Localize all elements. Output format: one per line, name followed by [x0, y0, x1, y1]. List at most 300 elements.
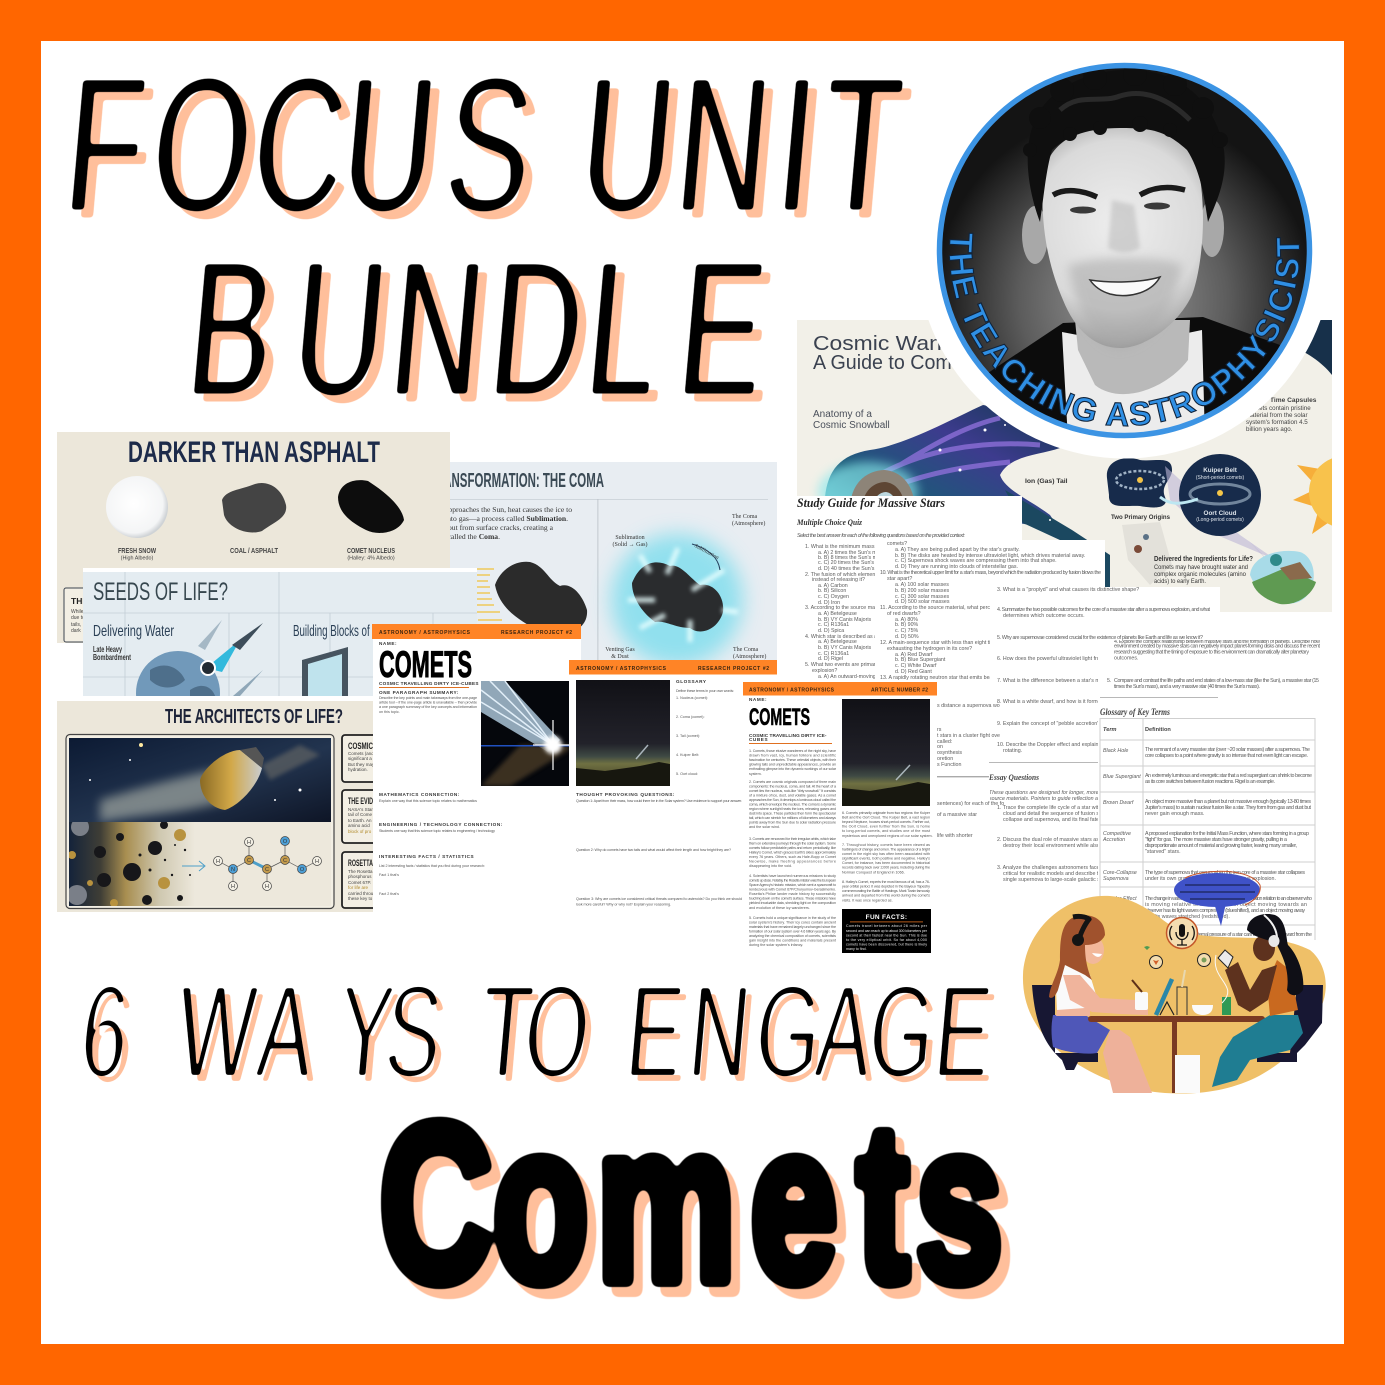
article left column: 3. Comets are renowned for their irregular orbits, which take: [749, 837, 836, 841]
orange header bar: RESEARCH PROJECT #2: [501, 630, 572, 636]
article left column: tail, which can stretch for millions of kilometers and always: [749, 816, 836, 820]
text: delivered the ingredients: [1154, 556, 1253, 585]
quiz column 1: d. D) Iron: [818, 600, 840, 606]
page: glossary of key terms: times the Sun's mass), and a very massive star (40 times the Sun's mass).: [1114, 684, 1260, 690]
section: glossary: 3. Tail (comet):: [676, 734, 700, 738]
left person: [1049, 915, 1152, 1093]
quiz column 2: d. D) They are running into clouds of interstellar gas.: [895, 564, 1018, 570]
table: glossary definitions: under its own gravity, triggering an enormous explosion.: [1145, 876, 1276, 882]
panel: cosmic wanderers infographic: [797, 320, 1385, 612]
labels: albedo comparison: COAL / ASPHALT: [230, 546, 278, 555]
section: engineering connection: Students one way that this science topic relates to engineering / technology: [379, 829, 495, 833]
illustration: solar system origins: Oort Cloud: [1204, 510, 1237, 517]
shirt: [1062, 330, 1205, 440]
quiz column 1: 3. According to the source material,: [805, 605, 888, 611]
section: thought provoking questions: Question 1: Apart from their mass, how could there be in the Solar system? Use evidence to support your answer.: [576, 799, 742, 803]
table: glossary definitions: An object more massive than a planet but not massive enough (typically 13-80 times: [1145, 799, 1311, 805]
quiz column 1: d. D) Spica: [818, 628, 844, 634]
callout box: THE: [71, 596, 88, 606]
side boxes: evidence cards: carried throu: [348, 891, 374, 896]
section: interesting facts: List 2 interesting facts / statistics that you find during your research:: [379, 864, 485, 868]
orange header bar: ASTRONOMY / ASTROPHYSICS: [576, 666, 667, 672]
fragments of definitions: on: [937, 744, 943, 750]
diagram: amino acid molecule: H: [247, 840, 251, 846]
diagram: amino acid molecule: O: [300, 867, 305, 873]
section: one paragraph summary: on this topic.: [379, 710, 400, 714]
section: glossary: [676, 679, 734, 776]
article left column: Rosetta's Philae lander made history by successfully: [749, 892, 836, 896]
article left column: Halley's Comet, which graces Earth's skies approximately: [749, 850, 836, 854]
heading: glossary: Glossary of Key Terms: [1100, 707, 1170, 717]
article left column: during the solar system's infancy.: [749, 943, 803, 947]
orange header bar: RESEARCH PROJECT #2: [698, 666, 769, 672]
table: glossary definitions: has its waves stretched (redshifted).: [1145, 914, 1230, 920]
title: focus unit bundle: [58, 38, 909, 436]
label: ion tail: Ion (Gas) Tail: [1025, 478, 1068, 485]
curved name text: THE TEACHING ASTROPHYSICIST: [948, 232, 1300, 427]
callout box: dark: [71, 628, 81, 634]
label: late heavy bombardment: [93, 646, 131, 660]
portrait badge: the teaching astrophysicist: [936, 62, 1312, 438]
table: glossary definitions: disproportionate amount of material and growing faster, leaving many smaller,: [1145, 843, 1297, 849]
decoration: upper-right navy and teal swirl: [1306, 320, 1332, 375]
orange header bar: [372, 624, 581, 639]
illustration: sun: [1293, 458, 1332, 534]
panel: the architects of life: [57, 701, 402, 912]
section: one paragraph summary: Describe the key points and main takeaways from the one-page: [379, 696, 477, 700]
section: thought provoking questions: [576, 792, 742, 906]
short answer questions: [997, 587, 1211, 754]
quiz column 1: b. B) 8 times the Sun's mass: [818, 555, 886, 561]
page: article number 2: [743, 682, 937, 957]
side boxes: evidence cards: Comet 67P.: [348, 880, 371, 885]
orange header bar: ARTICLE NUMBER #2: [871, 688, 928, 694]
photo: comet at dusk: [576, 680, 670, 786]
side boxes: evidence cards: THE EVID: [348, 796, 373, 806]
subtitle: COSMIC TRAVELLING DIRTY ICE-CUBES: [379, 681, 479, 686]
box: fun facts: FUN FACTS:: [866, 914, 907, 921]
section: interesting facts: [379, 854, 485, 896]
section: mathematics connection: [379, 792, 477, 803]
table: glossary definitions: "starved" stars.: [1145, 849, 1181, 855]
article left column: every 76 years. Others, such as Hale-Bopp or Comet: [749, 855, 836, 859]
quiz column 1: c. C) 20 times the Sun's mass: [818, 560, 889, 566]
article right column: harbingers of change and omen. The appearance of a bright: [842, 848, 930, 852]
quiz column 2: d. D) 500 solar masses: [895, 599, 950, 605]
subheading: delivering water: Delivering Water: [93, 623, 174, 640]
side boxes: evidence cards: Comets (and: [348, 751, 374, 756]
section: engineering connection: [379, 822, 503, 833]
fragments of definitions: s distance a supernova wo: [937, 703, 1000, 709]
subheading: multiple choice quiz: Multiple Choice Quiz: [796, 518, 863, 527]
article left column: 1. Comets, those elusive wanderers of the night sky, have: [749, 749, 836, 753]
article left column: region where sunlight heats the ices, releasing gases and: [749, 807, 836, 811]
quiz column 1: d. D) Rigel: [818, 656, 843, 662]
article left column: points away from the Sun due to solar radiation pressure: [749, 820, 836, 824]
article left column: solar system's history. Their icy cores contain ancient: [749, 920, 836, 924]
labels: albedo comparison: COMET NUCLEUS: [347, 546, 395, 555]
framed illustration: [66, 734, 334, 908]
quiz column 1: b. B) VY Canis Majoris: [818, 617, 872, 623]
side boxes: evidence cards: hydration.: [348, 767, 368, 772]
labels: albedo comparison: (High Albedo): [121, 556, 154, 562]
illustration: solar system origins: (Long-period comets): [1196, 517, 1244, 523]
smile: [1090, 277, 1160, 296]
article left column: comets follow predictable paths and return periodically, like: [749, 846, 836, 850]
fragments of definitions: of a massive star: [937, 812, 977, 818]
table: glossary definitions: Blue Supergiant: [1103, 774, 1141, 780]
table: glossary definitions: A proposed explanation for the Initial Mass Function, where stars forming in a group: [1145, 831, 1309, 837]
quiz column 1: a. A) Betelgeuse: [818, 611, 857, 617]
essay questions list: collapse and supernova, and its final fate.: [1003, 817, 1100, 823]
essay questions list: single supernova to large-scale galactic simulations: [1003, 877, 1124, 883]
section: glossary: 2. Coma (comet):: [676, 715, 704, 719]
right chair: [1257, 985, 1323, 1062]
callout box: While: [71, 609, 84, 615]
short answer questions: 9. Explain the concept of "pebble accretion" as a mechanism: [997, 721, 1140, 727]
fragments of definitions: s Function: [937, 762, 961, 768]
labels: coma callouts: Venting Gas: [605, 647, 635, 653]
essay questions list: 2. Discuss the dual role of massive stars as both destructive: [997, 837, 1138, 843]
box: fun facts: to the very elliptical orbit. So far about 4,000: [846, 938, 927, 942]
panel: seeds of life: [83, 568, 477, 696]
side boxes: evidence cards: block of pro: [348, 829, 372, 834]
section: one paragraph summary: [379, 690, 477, 714]
panel: transformation the coma: [450, 462, 777, 660]
name field: NAME:: [379, 641, 397, 646]
text: delivered the ingredients: acids) to early Earth.: [1154, 578, 1206, 585]
table: glossary definitions: Term: [1103, 727, 1116, 733]
quiz column 1: b. B) VY Canis Majoris: [818, 645, 872, 651]
illustration: comet tail: [818, 405, 1110, 592]
quiz column 2: a. A) 80%: [895, 617, 918, 623]
section: thought provoking questions: THOUGHT PROVOKING QUESTIONS:: [576, 792, 675, 797]
quiz column 1: b. B) Silicon: [818, 588, 846, 594]
illustration: solar system origins: (Short-period comets): [1196, 475, 1245, 481]
article left column: glowing tails and unpredictable appearances, provide an: [749, 762, 836, 766]
section: one paragraph summary: ONE PARAGRAPH SUMMARY:: [379, 690, 459, 695]
essay questions list: critical for realistic models and describe the "ans: [1003, 871, 1117, 877]
photo: comet over milky way: [481, 681, 569, 786]
page: glossary of key terms: research suggesting that the timing of exposure to this environment can dramatically alter planetary: [1114, 650, 1309, 656]
panel: darker than asphalt: [57, 432, 450, 643]
article right column: [842, 811, 933, 902]
side boxes: evidence cards: for life are: [348, 885, 369, 890]
heading: coma: TRANSFORMATION: THE COMA: [428, 470, 604, 492]
section: glossary: 1. Nucleus (comet):: [676, 696, 708, 700]
table: glossary definitions: Competitive: [1103, 831, 1131, 837]
heading: cosmic wanderers: A Guide to Comets: [813, 352, 978, 374]
text: time capsules: billion years ago.: [1246, 426, 1293, 433]
essay questions list: These questions are designed for longer, more detailed responses: [989, 790, 1145, 796]
quiz column 2: exhausting the hydrogen in its core?: [887, 646, 972, 652]
text block: sublimation: [450, 507, 572, 539]
short answer questions: 5. Why are supernovae considered crucial for the existence of planets like Earth and life as we know it?: [997, 635, 1203, 641]
labels: coma callouts: Sublimation: [615, 535, 645, 541]
table: glossary definitions: The type of supernova that occurs when the iron core of a massive star collapses: [1145, 870, 1305, 876]
section: glossary: 4. Kuiper Belt:: [676, 753, 699, 757]
instruction: Select the best answer for each of the following questions based on the provided context:: [797, 533, 966, 539]
text: time capsules: system's formation 4.5: [1246, 419, 1308, 426]
text: time capsules: Comets contain pristine: [1246, 405, 1311, 412]
quiz column 2: d. D) Red Giant: [895, 669, 932, 675]
article left column: and the solar wind.: [749, 825, 780, 829]
box: fun facts: [842, 909, 931, 953]
article left column: [749, 749, 837, 947]
essay questions list: destroy their local environment while also enabling: [1003, 843, 1121, 849]
diagram: amino acid molecule: H: [315, 859, 319, 865]
article left column: enthralling glimpse into the dynamic workings of our solar: [749, 767, 837, 771]
illustration: earth with comets: [136, 620, 263, 696]
quiz column 1: a. A) Carbon: [818, 583, 848, 589]
page: glossary of key terms: 5.: [1107, 678, 1111, 684]
side boxes: evidence cards: The Rosetta: [348, 869, 373, 874]
article right column: Belt and the Oort Cloud. The Kuiper Belt, a vast region: [842, 816, 930, 820]
article left column: disappearing into the void.: [749, 864, 792, 868]
page: research project worksheet 1: [372, 624, 581, 914]
short answer questions: 6. How does the powerful ultraviolet light from massive stars: [997, 656, 1138, 662]
nose shadow: [1108, 200, 1140, 252]
labels: coma callouts: & Dust: [611, 654, 629, 660]
text: delivered the ingredients: Delivered the Ingredients for Life?: [1154, 556, 1253, 563]
article right column: the Oort Cloud, even further from the Sun, is home: [842, 824, 930, 828]
illustration: yellow heat arrows: [477, 569, 502, 620]
article left column: 2. Comets are cosmic originals composed of three main: [749, 780, 836, 784]
quiz column 1: c. C) R136a1: [818, 622, 849, 628]
article right column: Comet, for instance, has been documented in historical: [842, 861, 930, 865]
box: fun facts: second at their fastest near the Sun. This is due: [846, 934, 927, 938]
fragments of definitions: t stars in a cluster fight ove: [937, 733, 1000, 739]
illustration: two people podcasting: [1023, 871, 1326, 1094]
heading: cosmic wanderers: [813, 335, 950, 369]
quiz column 2: a. A) They are being pulled apart by the star's gravity.: [895, 547, 1020, 553]
essay questions list: [989, 790, 1145, 883]
page: study guide for massive stars: [795, 495, 1105, 685]
label: late heavy bombardment: Late Heavy: [93, 645, 122, 654]
text block: sublimation: turn directly into gas—a process called Sublimation.: [406, 514, 568, 523]
page: glossary of key terms: 4. Explore the complex relationship between massive stars and the formation of planets. Describe how: [1114, 639, 1320, 645]
labels: coma callouts: The Coma: [732, 514, 757, 520]
section: glossary: GLOSSARY: [676, 679, 707, 684]
quiz column 1: instead of releasing it?: [812, 577, 865, 583]
page: glossary of key terms: environment created by massive stars can negatively impact planet-forming disks and discuss the recent: [1114, 644, 1321, 650]
orange header bar: [569, 660, 777, 674]
illustration: glowing coma: Sublimation: [693, 543, 720, 561]
illustration: solar system origins: Kuiper Belt: [1203, 467, 1238, 474]
article right column: records dating back over 2,000 years, including during the: [842, 866, 930, 870]
quiz column 2: b. B) The disks are heated by intense ultraviolet light, which drives material away.: [895, 553, 1085, 559]
article left column: 4. Scientists have launched numerous missions to study: [749, 874, 836, 878]
neck: [1075, 320, 1190, 394]
quiz column 2: c. C) 75%: [895, 628, 919, 634]
article right column: Norman Conquest of England in 1066.: [842, 870, 905, 874]
planets and debris: [1122, 522, 1172, 585]
subheading: building blocks: Building Blocks of Life: [293, 623, 388, 640]
text block: sublimation: As a comet approaches the Sun, heat causes the ice to: [409, 505, 572, 514]
illustration: spacecraft over comet: [69, 738, 331, 822]
fragments of definitions: life with shorter: [937, 833, 973, 839]
subtitle: CUBES: [749, 737, 768, 742]
short answer questions: 8. What is a white dwarf, and how is it formed?: [997, 699, 1107, 705]
title line: focus unit: FOCUS UNIT: [58, 38, 909, 252]
box: fun facts: comets have been discovered, but there is likely: [846, 942, 927, 946]
eyes: [1070, 202, 1170, 214]
quiz column 2: c. C) 300 solar masses: [895, 594, 950, 600]
table: glossary definitions: Doppler Effect: [1103, 896, 1137, 902]
mustard blob background: [1023, 896, 1326, 1094]
quiz column 1: a. A) 2 times the Sun's mass: [818, 550, 885, 556]
page: glossary of key terms: outcomes.: [1114, 656, 1138, 662]
fragments of definitions: rs: [937, 727, 942, 733]
article left column: comets up close. Notably, the Rosetta mission was the European: [749, 878, 836, 882]
table: glossary definitions: The remnant of a very massive star (over ~20 solar masses) after a supernova. The: [1145, 747, 1310, 753]
side boxes: evidence cards: ROSETTA: [348, 858, 373, 868]
table: glossary definitions: as its core switches between fusion reactions. Rigel is an example.: [1145, 779, 1275, 785]
quiz column 2: [880, 541, 1101, 681]
table: glossary definitions: "fight" for gas. The more massive stars have stronger gravity, pulling in a: [1145, 837, 1287, 843]
short answer questions: rotating.: [1003, 748, 1022, 754]
article left column: coma, which envelops the nucleus. The coma is a dynamic: [749, 802, 836, 806]
side boxes: evidence cards: amino acid: [348, 823, 370, 828]
article right column: year orbital period. It was depicted in the Bayeux Tapestry: [842, 884, 930, 888]
name field: NAME:: [749, 697, 767, 702]
label: late heavy bombardment: Bombardment: [93, 653, 131, 662]
box: fun facts: second and can reach up to about 300 kilometers per: [846, 929, 928, 933]
reaction icons: [1144, 946, 1210, 968]
article left column: Space Agency's historic mission, which sent a spacecraft to: [749, 883, 836, 887]
side boxes: evidence cards: [342, 735, 402, 908]
section: mathematics connection: Explain one way that this science topic relates to mathematics: [379, 799, 477, 803]
quiz column 2: c. C) Supernova shock waves are compressing them into that shape.: [895, 558, 1057, 564]
left chair: [1032, 985, 1098, 1070]
quiz column 2: b. B) Blue Supergiant: [895, 657, 946, 663]
callout box: tails,: [71, 622, 81, 628]
heading: essay questions: Essay Questions: [988, 772, 1040, 782]
diagram: amino acid molecule: H: [216, 859, 220, 865]
quiz column 2: comets?: [887, 541, 907, 547]
quiz column 2: 12. A main-sequence star with less than eight times the: [880, 640, 1009, 646]
article right column: 7. Throughout history, comets have been viewed as: [842, 843, 930, 847]
article left column: of a mixture of ice, dust, and volatile gases. As a comet: [749, 794, 836, 798]
quiz column 1: 2. The fusion of which element marks: [805, 572, 893, 578]
subtitle: [749, 733, 827, 742]
section: thought provoking questions: look more careful? Why or why not? Explain your reasoning.: [576, 902, 671, 906]
text block: sublimation: vast atmosphere called the Coma.: [396, 532, 500, 541]
side boxes: evidence cards: to Earth. An: [348, 818, 372, 823]
illustration: organic dust and amino acid: [67, 818, 331, 907]
labels: coma callouts: (Atmosphere): [732, 520, 765, 527]
text: delivered the ingredients: Comets may have brought water and: [1154, 564, 1248, 571]
section: mathematics connection: MATHEMATICS CONNECTION:: [379, 792, 460, 797]
text block: sublimation: Gas and dust burst out from surface cracks, creating a: [390, 523, 554, 532]
short answer questions: determines which outcome occurs.: [1003, 613, 1085, 619]
article left column: formation of our solar system over 4.6 billion years ago. By: [749, 930, 836, 934]
article left column: fascination for centuries. These celestial objects, with their: [749, 758, 837, 762]
article right column: arrived and departed from this world during the comet's: [842, 894, 930, 898]
article left column: rendezvous with Comet 67P/Churyumov-Gerasimenko.: [749, 888, 836, 892]
essay questions list: 1. Trace the complete life cycle of a star with 25 times: [997, 805, 1123, 811]
article left column: analyzing the chemical composition of comets, scientists: [749, 934, 836, 938]
section: one paragraph summary: article tool – if the one-page article is unavailable – then provide: [379, 700, 477, 704]
quiz column 2: a. A) 100 solar masses: [895, 582, 949, 588]
section: interesting facts: Fact 2 that's: [379, 892, 399, 896]
text: delivered the ingredients: complex organic molecules (amino: [1154, 571, 1246, 578]
table: glossary definitions: Supernova: [1103, 876, 1129, 882]
labels: coma callouts: The Coma: [733, 647, 758, 653]
fragments of definitions: called:: [937, 739, 952, 745]
section: glossary: Define these terms in your own words:: [676, 689, 734, 693]
side boxes: evidence cards: phosphorus: [348, 874, 372, 879]
short answer questions: 4. Summarize the two possible outcomes for the core of a massive star after a supernova explosion, and what: [997, 607, 1211, 613]
article right column: significant events, both positive and negative. Halley's: [842, 856, 930, 860]
icon: fresh snow sphere: [106, 476, 168, 538]
quiz column 2: c. C) White Dwarf: [895, 663, 937, 669]
section: thought provoking questions: Question 3: Why are comets ice considered critical threats compared to asteroids? Do you think we should: [576, 897, 742, 901]
side boxes: evidence cards: COSMIC: [348, 741, 373, 751]
heading: architects of life: THE ARCHITECTS OF LIFE?: [165, 706, 343, 728]
diagram: amino acid molecule: O: [283, 839, 288, 845]
illustration: glowing coma: [611, 534, 743, 666]
icon: comet nucleus: [338, 480, 404, 533]
quiz column 2: 11. According to the source material, what percentage of: [880, 605, 1013, 611]
diagram: amino acid molecule: C: [247, 858, 251, 864]
heading: comets: COMETS: [379, 644, 472, 685]
subheading: anatomy: Cosmic Snowball: [813, 420, 890, 431]
quiz column 2: 10. What is the theoretical upper limit for a star's mass, beyond which the radiation produced by fusion blows the: [880, 570, 1101, 576]
illustration: comet striking early earth: [1248, 540, 1316, 604]
quiz column 1: d. D) 40 times the Sun's mass: [818, 566, 889, 572]
essay questions list: 3. Analyze the challenges astronomers face when: [997, 865, 1114, 871]
article left column: drawn from vast, icy, human folklore and scientific: [749, 754, 836, 758]
heading: study guide: Study Guide for Massive Stars: [797, 495, 945, 510]
jacket: [950, 317, 1330, 460]
orange header bar: ASTRONOMY / ASTROPHYSICS: [749, 688, 835, 694]
article right column: beyond Neptune, houses short-period comets. Farther out,: [842, 820, 930, 824]
heading: seeds of life: SEEDS OF LIFE?: [93, 578, 228, 606]
quiz column 2: d. D) 50%: [895, 634, 919, 640]
article right column: commemorating the Battle of Hastings. Mark Twain famously: [842, 889, 930, 893]
right person: [1212, 914, 1303, 1087]
quiz column 2: of red dwarfs?: [887, 611, 921, 617]
side boxes: evidence cards: these key to: [348, 896, 373, 901]
diagram: amino acid molecule: H: [265, 884, 269, 890]
page: research project worksheet 2: [569, 660, 777, 910]
subheading: anatomy: [813, 410, 890, 428]
table: glossary definitions: Core-Collapse: [1103, 870, 1137, 876]
illustration: comet nucleus: [495, 562, 587, 632]
section: one paragraph summary: a one paragraph summary of the key concepts and information: [379, 705, 477, 709]
subtitle: six ways to engage: 6 WAYS TO ENGAGE: [76, 958, 997, 1106]
heading: comets: COMETS: [749, 704, 810, 731]
article left column: materials that have remained largely unchanged since the: [749, 925, 836, 929]
article right column: 6. Comets primarily originate from two regions: the Kuiper: [842, 811, 931, 815]
blue ring: [940, 66, 1310, 436]
ears: [1022, 199, 1224, 264]
side boxes: evidence cards: tail of Come: [348, 812, 373, 817]
microphone icon: [1166, 918, 1198, 948]
quiz column 2: star apart?: [887, 576, 912, 582]
fragments of definitions: osynthesis: [937, 750, 962, 756]
short answer questions: 10. Describe the Doppler effect and explain how astronomers: [997, 742, 1141, 748]
box: fun facts: Comets travel between about 26 miles per: [846, 924, 928, 928]
section: glossary: 5. Oort cloud:: [676, 772, 698, 776]
page: glossary of key terms: [1098, 639, 1330, 943]
orange header bar: [743, 682, 937, 696]
table: glossary definitions: Jupiter's mass) to sustain nuclear fusion like a star. They form from gas and dust but: [1145, 805, 1312, 811]
diagram: amino acid molecule: [214, 836, 322, 890]
table: glossary definitions: is moving relative to the source. An object moving towards an: [1145, 902, 1307, 908]
stubble and chin shadow: [1068, 258, 1182, 348]
